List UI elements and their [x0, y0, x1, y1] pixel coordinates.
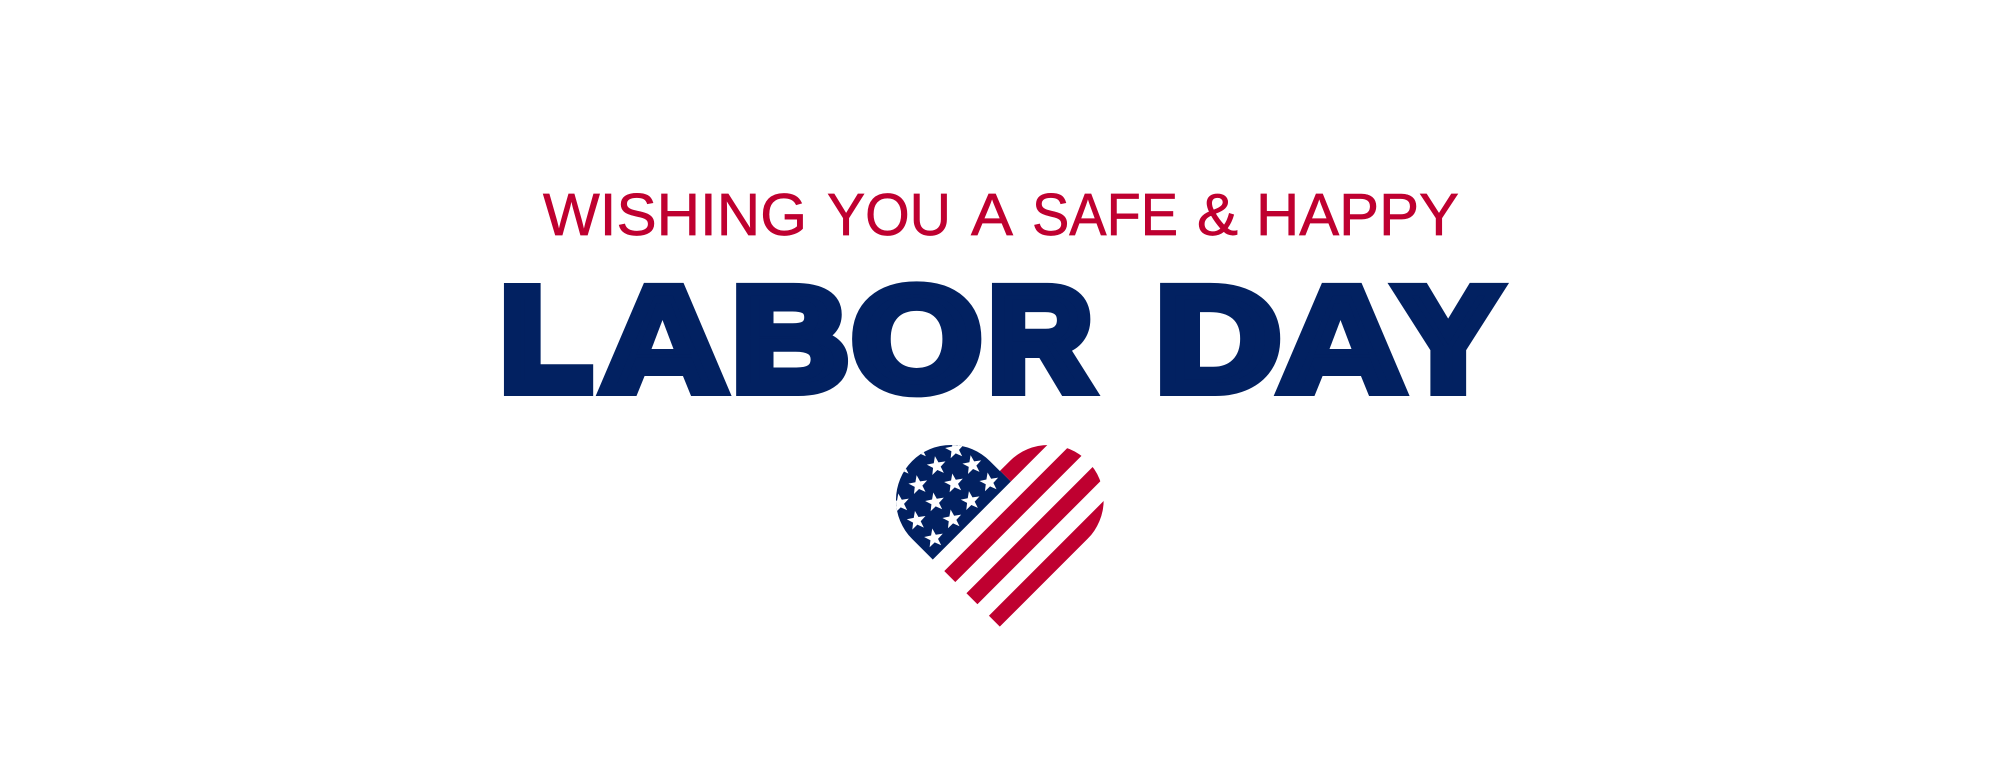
title: labor day: R — [989, 258, 1092, 421]
icon: american flag heart — [896, 445, 1104, 626]
title: labor day: D — [1156, 258, 1280, 421]
title: labor day: Y — [1397, 258, 1499, 421]
title: labor day: L — [502, 262, 589, 419]
subtitle: wishing you a safe & happy: HAPPY — [1256, 181, 1459, 248]
subtitle: wishing you a safe & happy: SAFE — [1032, 181, 1178, 248]
title: labor day: A — [602, 258, 725, 421]
subtitle: wishing you a safe & happy: A — [971, 181, 1013, 248]
title: labor day: B — [733, 259, 848, 421]
title: labor day — [502, 258, 1499, 421]
title: labor day: A — [1280, 258, 1403, 421]
title: labor day: O — [853, 258, 981, 420]
flag stripes — [944, 445, 1104, 626]
subtitle: wishing you a safe & happy: WISHING — [543, 181, 807, 248]
subtitle: wishing you a safe & happy: YOU — [827, 181, 951, 248]
subtitle: wishing you a safe & happy — [543, 181, 1459, 248]
flag canton — [896, 445, 1011, 560]
subtitle: wishing you a safe & happy: & — [1197, 181, 1238, 248]
